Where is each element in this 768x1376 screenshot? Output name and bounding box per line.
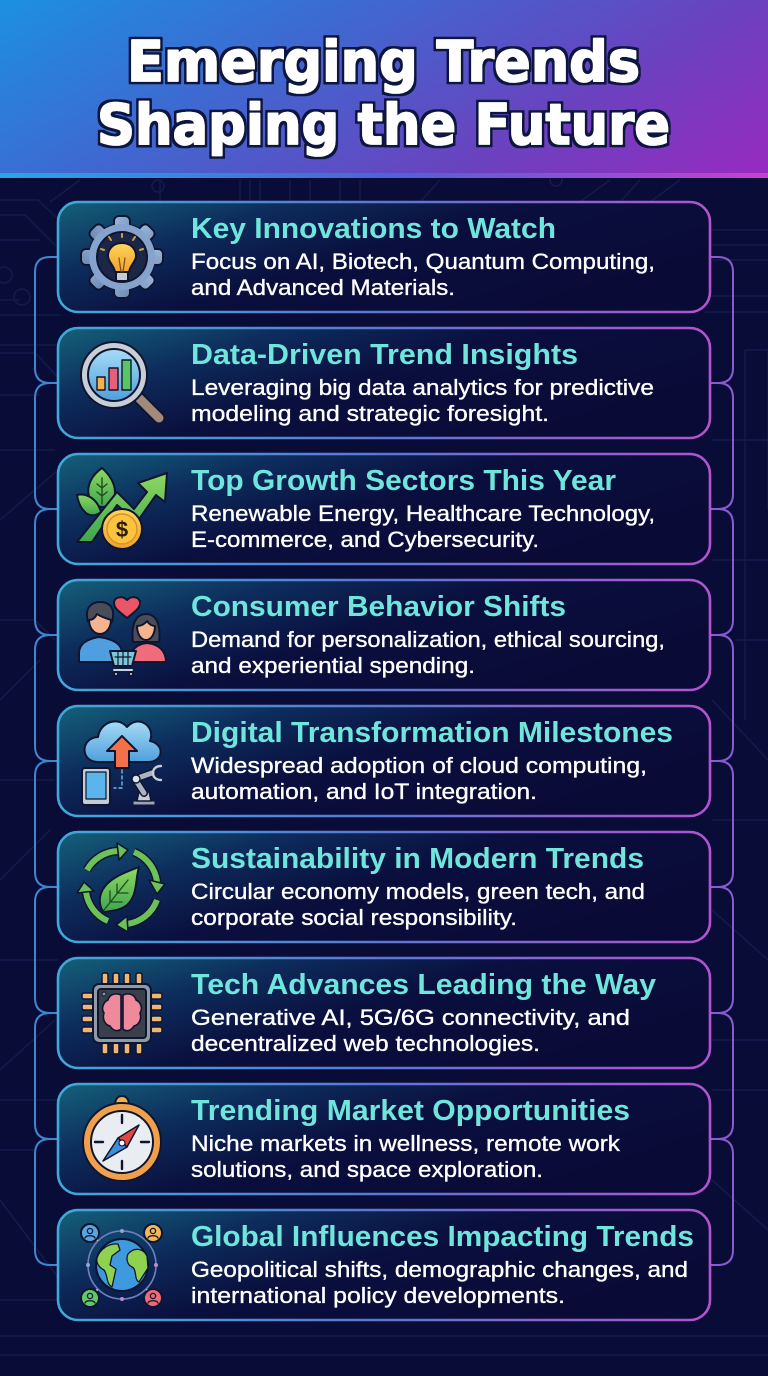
description — [191, 1005, 630, 1056]
description: automation, and IoT integration. — [191, 779, 537, 804]
header divider bar — [0, 173, 768, 178]
panel: data-driven insights — [58, 328, 710, 438]
heading: Top Growth Sectors This Year — [191, 465, 616, 497]
description: international policy developments. — [191, 1283, 565, 1308]
description: corporate social responsibility. — [191, 905, 517, 930]
description — [191, 1131, 621, 1182]
icon: magnifier with bar chart — [81, 342, 159, 418]
description — [191, 1257, 688, 1308]
description — [191, 501, 655, 552]
icon: leaves, rising arrow and coin — [77, 468, 167, 549]
icon: globe with connected people — [81, 1224, 162, 1307]
description: and Advanced Materials. — [191, 275, 455, 300]
card background — [58, 454, 710, 564]
heading: Global Influences Impacting Trends — [191, 1221, 694, 1253]
coin dollar sign: $ — [116, 517, 128, 542]
description: modeling and strategic foresight. — [191, 401, 549, 426]
description — [191, 375, 654, 426]
description: and experiential spending. — [191, 653, 475, 678]
description — [191, 879, 645, 930]
card background — [58, 202, 710, 312]
description: Focus on AI, Biotech, Quantum Computing, — [191, 249, 655, 274]
description: Geopolitical shifts, demographic changes, and — [191, 1257, 688, 1282]
right connector brackets — [710, 257, 733, 1265]
panel: growth sectors — [58, 454, 710, 564]
description: decentralized web technologies. — [191, 1031, 540, 1056]
panel: market opportunities — [58, 1084, 710, 1194]
icon: chip with brain — [82, 973, 162, 1054]
heading: Sustainability in Modern Trends — [191, 843, 644, 875]
panel: consumer behavior — [58, 580, 710, 690]
panel: key innovations — [58, 202, 710, 312]
heading: Consumer Behavior Shifts — [191, 591, 566, 623]
description — [191, 753, 647, 804]
panel: sustainability — [58, 832, 710, 942]
description: E-commerce, and Cybersecurity. — [191, 527, 539, 552]
left connector brackets — [35, 257, 58, 1265]
title: Shaping the Future — [97, 93, 670, 158]
card background — [58, 1210, 710, 1320]
header band — [0, 0, 768, 174]
card background — [58, 706, 710, 816]
card background — [58, 580, 710, 690]
description: Circular economy models, green tech, and — [191, 879, 645, 904]
description: Generative AI, 5G/6G connectivity, and — [191, 1005, 630, 1030]
heading: Key Innovations to Watch — [191, 213, 556, 245]
icon: couple with heart and shopping cart — [79, 597, 166, 676]
description: Niche markets in wellness, remote work — [191, 1131, 621, 1156]
card background — [58, 328, 710, 438]
panel: digital transformation — [58, 706, 710, 816]
card background — [58, 958, 710, 1068]
heading: Trending Market Opportunities — [191, 1095, 630, 1127]
description — [191, 249, 655, 300]
panel: tech advances — [58, 958, 710, 1068]
title: Emerging Trends — [127, 30, 640, 95]
icon: compass — [83, 1096, 161, 1181]
heading: Tech Advances Leading the Way — [191, 969, 656, 1001]
card background — [58, 832, 710, 942]
description: Renewable Energy, Healthcare Technology, — [191, 501, 655, 526]
heading: Digital Transformation Milestones — [191, 717, 673, 749]
panel: global influences — [58, 1210, 710, 1320]
card background — [58, 1084, 710, 1194]
description: Demand for personalization, ethical sourcing, — [191, 627, 665, 652]
icon: recycling arrows around leaf — [77, 843, 165, 932]
description: Widespread adoption of cloud computing, — [191, 753, 647, 778]
heading: Data-Driven Trend Insights — [191, 339, 578, 371]
icon: cloud, tablet and robot arm — [82, 721, 161, 805]
description: Leveraging big data analytics for predictive — [191, 375, 654, 400]
description: solutions, and space exploration. — [191, 1157, 543, 1182]
title — [97, 30, 670, 158]
icon: gear with light bulb — [81, 216, 163, 298]
description — [191, 627, 665, 678]
